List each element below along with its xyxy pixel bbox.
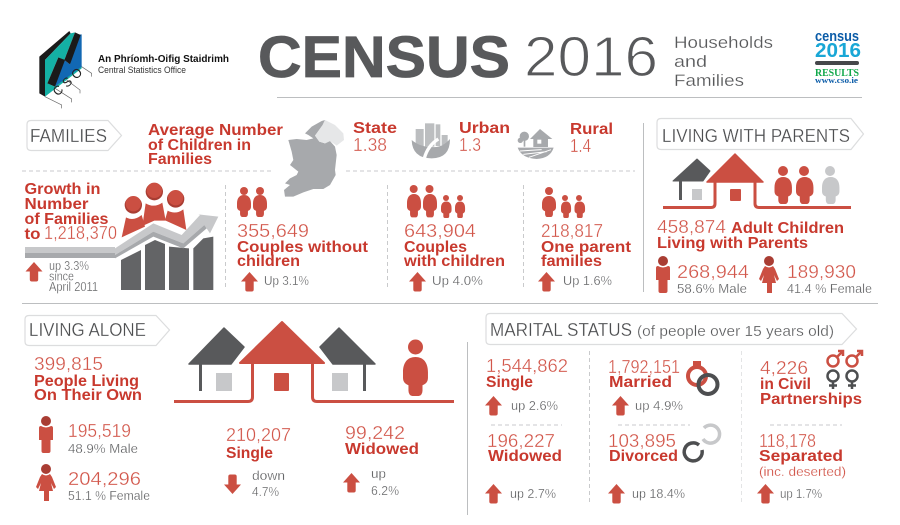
text: widowed: Widowed (488, 448, 562, 465)
subtitle: Households (674, 34, 773, 52)
text: married: Married (609, 374, 672, 391)
subtitle: Families (674, 72, 744, 90)
icon: up arrow (608, 484, 625, 504)
text: up 6.2% (371, 466, 399, 498)
icon: up arrow (485, 396, 502, 416)
text: male count (68, 421, 138, 456)
icon: male (39, 416, 53, 453)
icon: up arrow (485, 484, 502, 504)
text: one parent families: families (541, 253, 602, 270)
icon: wedding rings (688, 361, 718, 394)
stat: state: 1.38 (353, 135, 387, 155)
icon: up arrow (757, 484, 774, 504)
text: married (608, 357, 680, 391)
icon: down arrow (224, 474, 241, 494)
map: Ireland (284, 120, 344, 197)
text: male count: 58.6% Male (677, 281, 747, 296)
text: down 4.7%: down (252, 468, 285, 483)
text: divorced: 103,895 (608, 431, 676, 451)
text: one parent families: One parent (541, 239, 631, 256)
chart: growth people, bars and arrow (25, 183, 218, 290)
text: adult children living with parents: 458,874 (657, 217, 726, 237)
panel: marital status (485, 314, 862, 504)
text: growth in number of families (24, 181, 117, 243)
text: couples with children: 643,904 (404, 221, 476, 241)
icon: couple with children (407, 185, 465, 218)
text: people living on their own: On Their Own (34, 387, 142, 404)
text: couples without children: Couples without (237, 239, 368, 256)
illustration: three houses and person (174, 322, 454, 402)
text: growth in number of families: Number (24, 196, 88, 213)
stat: rural: 1.4 (570, 136, 591, 156)
text: up 3.1%: Up 3.1% (264, 273, 309, 288)
text: people living on their own: People Living (34, 373, 139, 390)
logo: Central Statistics Office (39, 31, 229, 108)
heading: average number of children: Families (148, 151, 212, 168)
heading: marital status: MARITAL STATUS (490, 320, 632, 340)
text: couples without children: children (237, 253, 300, 270)
text: single (486, 356, 568, 391)
text: single: 1,544,862 (486, 356, 568, 376)
heading: families: FAMILIES (30, 126, 107, 146)
icon: couple (237, 187, 267, 217)
text: up 1.6%: Up 1.6% (563, 273, 612, 288)
icon: female (36, 464, 56, 501)
icon: female (759, 256, 779, 293)
text: couples without children: 355,649 (237, 221, 309, 241)
title: CENSUS (258, 25, 510, 90)
heading: marital status (486, 314, 856, 344)
text: separated: Separated (759, 448, 843, 465)
text: couples with children: Couples (404, 239, 467, 256)
text: up 3.3% since April 2011 (49, 258, 98, 294)
logo: census 2016 results: www.cso.ie (815, 76, 859, 85)
text: one parent families: 218,817 (541, 221, 603, 241)
text: up 2.7%: up 2.7% (510, 486, 556, 501)
logo: Central Statistics Office: An Phríomh-Oifig Staidrimh (98, 54, 229, 65)
text: single: 210,207 (226, 425, 291, 445)
text: male count (677, 262, 749, 296)
text: separated (759, 431, 846, 479)
panel: families (24, 120, 631, 294)
logo: census 2016 results: 2016 (815, 40, 861, 62)
stat: state: State (353, 120, 397, 137)
logo: Central Statistics Office: Central Statistics Office (98, 65, 186, 76)
panel: living with parents (656, 118, 872, 296)
text: growth in number of families: Growth in (24, 181, 100, 198)
stat: urban (459, 120, 510, 155)
heading: families (27, 120, 122, 150)
heading: marital status: (of people over 15 years old) (637, 323, 834, 340)
icon: up arrow (26, 262, 42, 282)
text: male count: 195,519 (68, 421, 131, 441)
text: up 4.0%: Up 4.0% (432, 273, 483, 288)
title (258, 25, 658, 90)
stat: urban: Urban (459, 120, 510, 137)
stat: state (353, 120, 397, 155)
text: down 4.7%: 4.7% (252, 484, 279, 499)
text: adult children living with parents: Living with Parents (657, 235, 808, 252)
icon: broken rings (684, 425, 720, 461)
heading: living with parents (657, 118, 864, 150)
heading: living alone (25, 316, 170, 346)
logo: Central Statistics Office: CSO (50, 63, 88, 99)
text: growth in number of families: of Families (24, 211, 108, 228)
text: single: Single (226, 445, 273, 462)
stat: urban: 1.3 (459, 135, 481, 155)
text: adult children living with parents (657, 217, 844, 252)
text: couples with children: with children (403, 253, 505, 270)
text: growth in number of families: 1,218,370 (44, 223, 117, 243)
text: civil partnerships: Partnerships (760, 391, 862, 408)
icon: up arrow (343, 473, 360, 492)
illustration: houses and family (663, 154, 851, 208)
heading: average number of children: Average Number (148, 122, 283, 139)
text: couples with children (403, 221, 505, 270)
stat: rural: Rural (570, 121, 613, 138)
text: civil partnerships: in Civil (760, 376, 811, 393)
text: up 2.6%: up 2.6% (511, 398, 558, 413)
subtitle: and (674, 53, 707, 71)
text: up 6.2%: up (371, 466, 386, 481)
text: female count: 51.1 % Female (68, 488, 150, 503)
title: 2016 (524, 25, 658, 89)
text: civil partnerships: 4,226 (760, 358, 808, 378)
text: widowed (345, 423, 419, 458)
heading: average number of children: of Children in (148, 137, 251, 154)
icon: gender symbols (828, 351, 862, 389)
text: married: 1,792,151 (608, 357, 680, 377)
text: male count: 268,944 (677, 262, 749, 282)
text: widowed: Widowed (345, 441, 419, 458)
icon: up arrow (409, 272, 426, 292)
text: separated: (inc. deserted) (759, 464, 846, 479)
icon: up arrow (612, 396, 629, 416)
logo: census 2016 results: RESULTS (815, 67, 859, 79)
text: female count: 204,296 (68, 469, 141, 489)
text: civil partnerships (760, 358, 862, 408)
text: one parent families (541, 221, 631, 270)
text: up 3.3% since April 2011: April 2011 (49, 279, 98, 294)
logo: census 2016 results: census (815, 28, 859, 45)
text: female count: 41.4 % Female (787, 281, 872, 296)
text: divorced: Divorced (609, 448, 678, 465)
text: adult children living with parents: Adult Children (731, 220, 844, 237)
icon: city (412, 123, 450, 158)
text: up 18.4%: up 18.4% (632, 486, 685, 501)
icon: one parent family (542, 187, 585, 218)
heading: average number of children (148, 122, 283, 168)
stat: rural (570, 121, 613, 156)
icon: up arrow (538, 272, 555, 292)
text: people living on their own (34, 354, 142, 404)
text: divorced (608, 431, 678, 465)
text: separated: 118,178 (759, 431, 816, 451)
heading: living with parents: LIVING WITH PARENTS (662, 126, 850, 146)
text: female count (68, 469, 150, 503)
icon: up arrow (241, 272, 258, 292)
text: couples without children (237, 221, 368, 270)
text: down 4.7% (252, 468, 285, 499)
text: widowed: 196,227 (487, 431, 555, 451)
icon: male (656, 256, 670, 293)
text: up 4.9%: up 4.9% (635, 398, 683, 413)
text: female count (787, 262, 872, 296)
text: up 3.3% since April 2011: up 3.3% (49, 258, 89, 273)
subtitle (674, 34, 773, 90)
text: male count: 48.9% Male (68, 441, 138, 456)
text: widowed: 99,242 (345, 423, 405, 443)
heading: living alone: LIVING ALONE (29, 320, 146, 340)
text: up 6.2%: 6.2% (371, 483, 399, 498)
text: female count: 189,930 (787, 262, 856, 282)
text: people living on their own: 399,815 (34, 354, 103, 374)
panel: living alone (25, 316, 454, 503)
text: up 3.3% since April 2011: since (49, 268, 74, 284)
text: single: Single (486, 374, 533, 391)
text: up 1.7%: up 1.7% (780, 486, 822, 501)
icon: rural house (518, 129, 554, 159)
text: growth in number of families: to (24, 226, 40, 243)
text: single (226, 425, 291, 462)
text: widowed (487, 431, 562, 465)
logo: census 2016 results (815, 28, 861, 85)
